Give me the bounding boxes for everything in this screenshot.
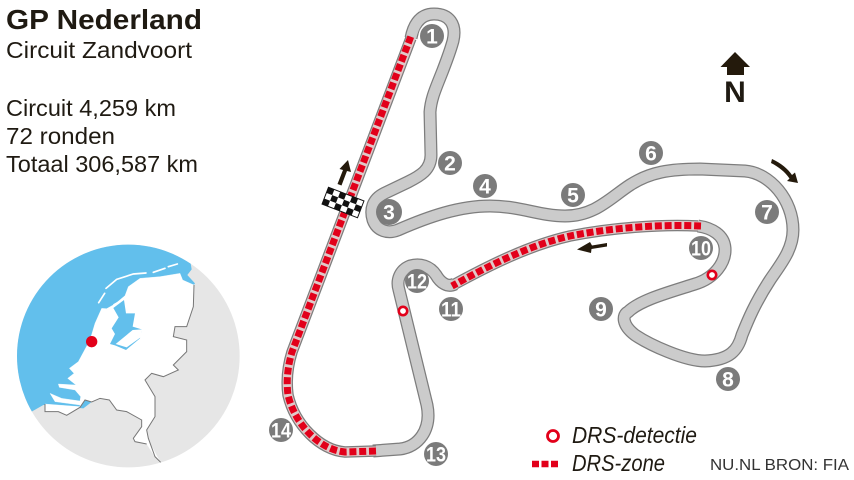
turn numbers: 13 (426, 444, 446, 466)
source credit: NU.NL BRON: FIA (710, 457, 849, 474)
title: GP Nederland (6, 4, 202, 35)
turn numbers: 1 (426, 26, 438, 48)
start direction arrow (338, 160, 351, 186)
turn numbers: 10 (691, 238, 711, 260)
turn numbers: 9 (595, 298, 607, 322)
location marker (86, 336, 97, 347)
Flevoland (116, 329, 142, 347)
turn numbers: 11 (441, 298, 461, 322)
DRS detection point 2 (708, 271, 716, 279)
north arrow (720, 52, 750, 109)
track main outline (372, 14, 793, 451)
circuit facts: 72 ronden (6, 123, 115, 149)
Wadden islands (99, 264, 177, 305)
DRS zone straight and turn 14 (287, 36, 411, 452)
north arrow: N (724, 76, 746, 109)
turn numbers: 2 (444, 152, 456, 176)
turn numbers: 14 (271, 420, 291, 442)
DRS detection point 1 (399, 307, 407, 315)
legend: DRS zone: DRS-zone (572, 450, 665, 476)
sea (17, 244, 195, 412)
turn numbers: 8 (722, 368, 734, 392)
direction arrow turn 10 (577, 242, 607, 253)
borders (45, 285, 194, 462)
locator map of the Netherlands (10, 240, 243, 472)
land (45, 273, 194, 462)
start finish flag (322, 187, 364, 218)
turn numbers: 3 (383, 202, 395, 224)
direction arrow turn 7 (771, 159, 798, 183)
turn numbers: 6 (645, 142, 657, 166)
circuit facts: Totaal 306,587 km (6, 151, 198, 177)
subtitle: Circuit Zandvoort (6, 37, 193, 63)
circuit facts (6, 95, 198, 177)
turn numbers (269, 22, 779, 466)
DRS zone turn 10 to 11 (452, 225, 701, 286)
legend: DRS detection: DRS-detectie (572, 422, 697, 448)
turn numbers: 5 (567, 184, 579, 208)
IJsselmeer (110, 300, 142, 350)
circuit facts: Circuit 4,259 km (6, 95, 176, 121)
turn numbers: 7 (761, 202, 773, 224)
turn numbers: 12 (407, 270, 427, 294)
legend: DRS zone (532, 450, 665, 476)
race track (287, 14, 793, 452)
turn numbers: 4 (479, 176, 491, 198)
